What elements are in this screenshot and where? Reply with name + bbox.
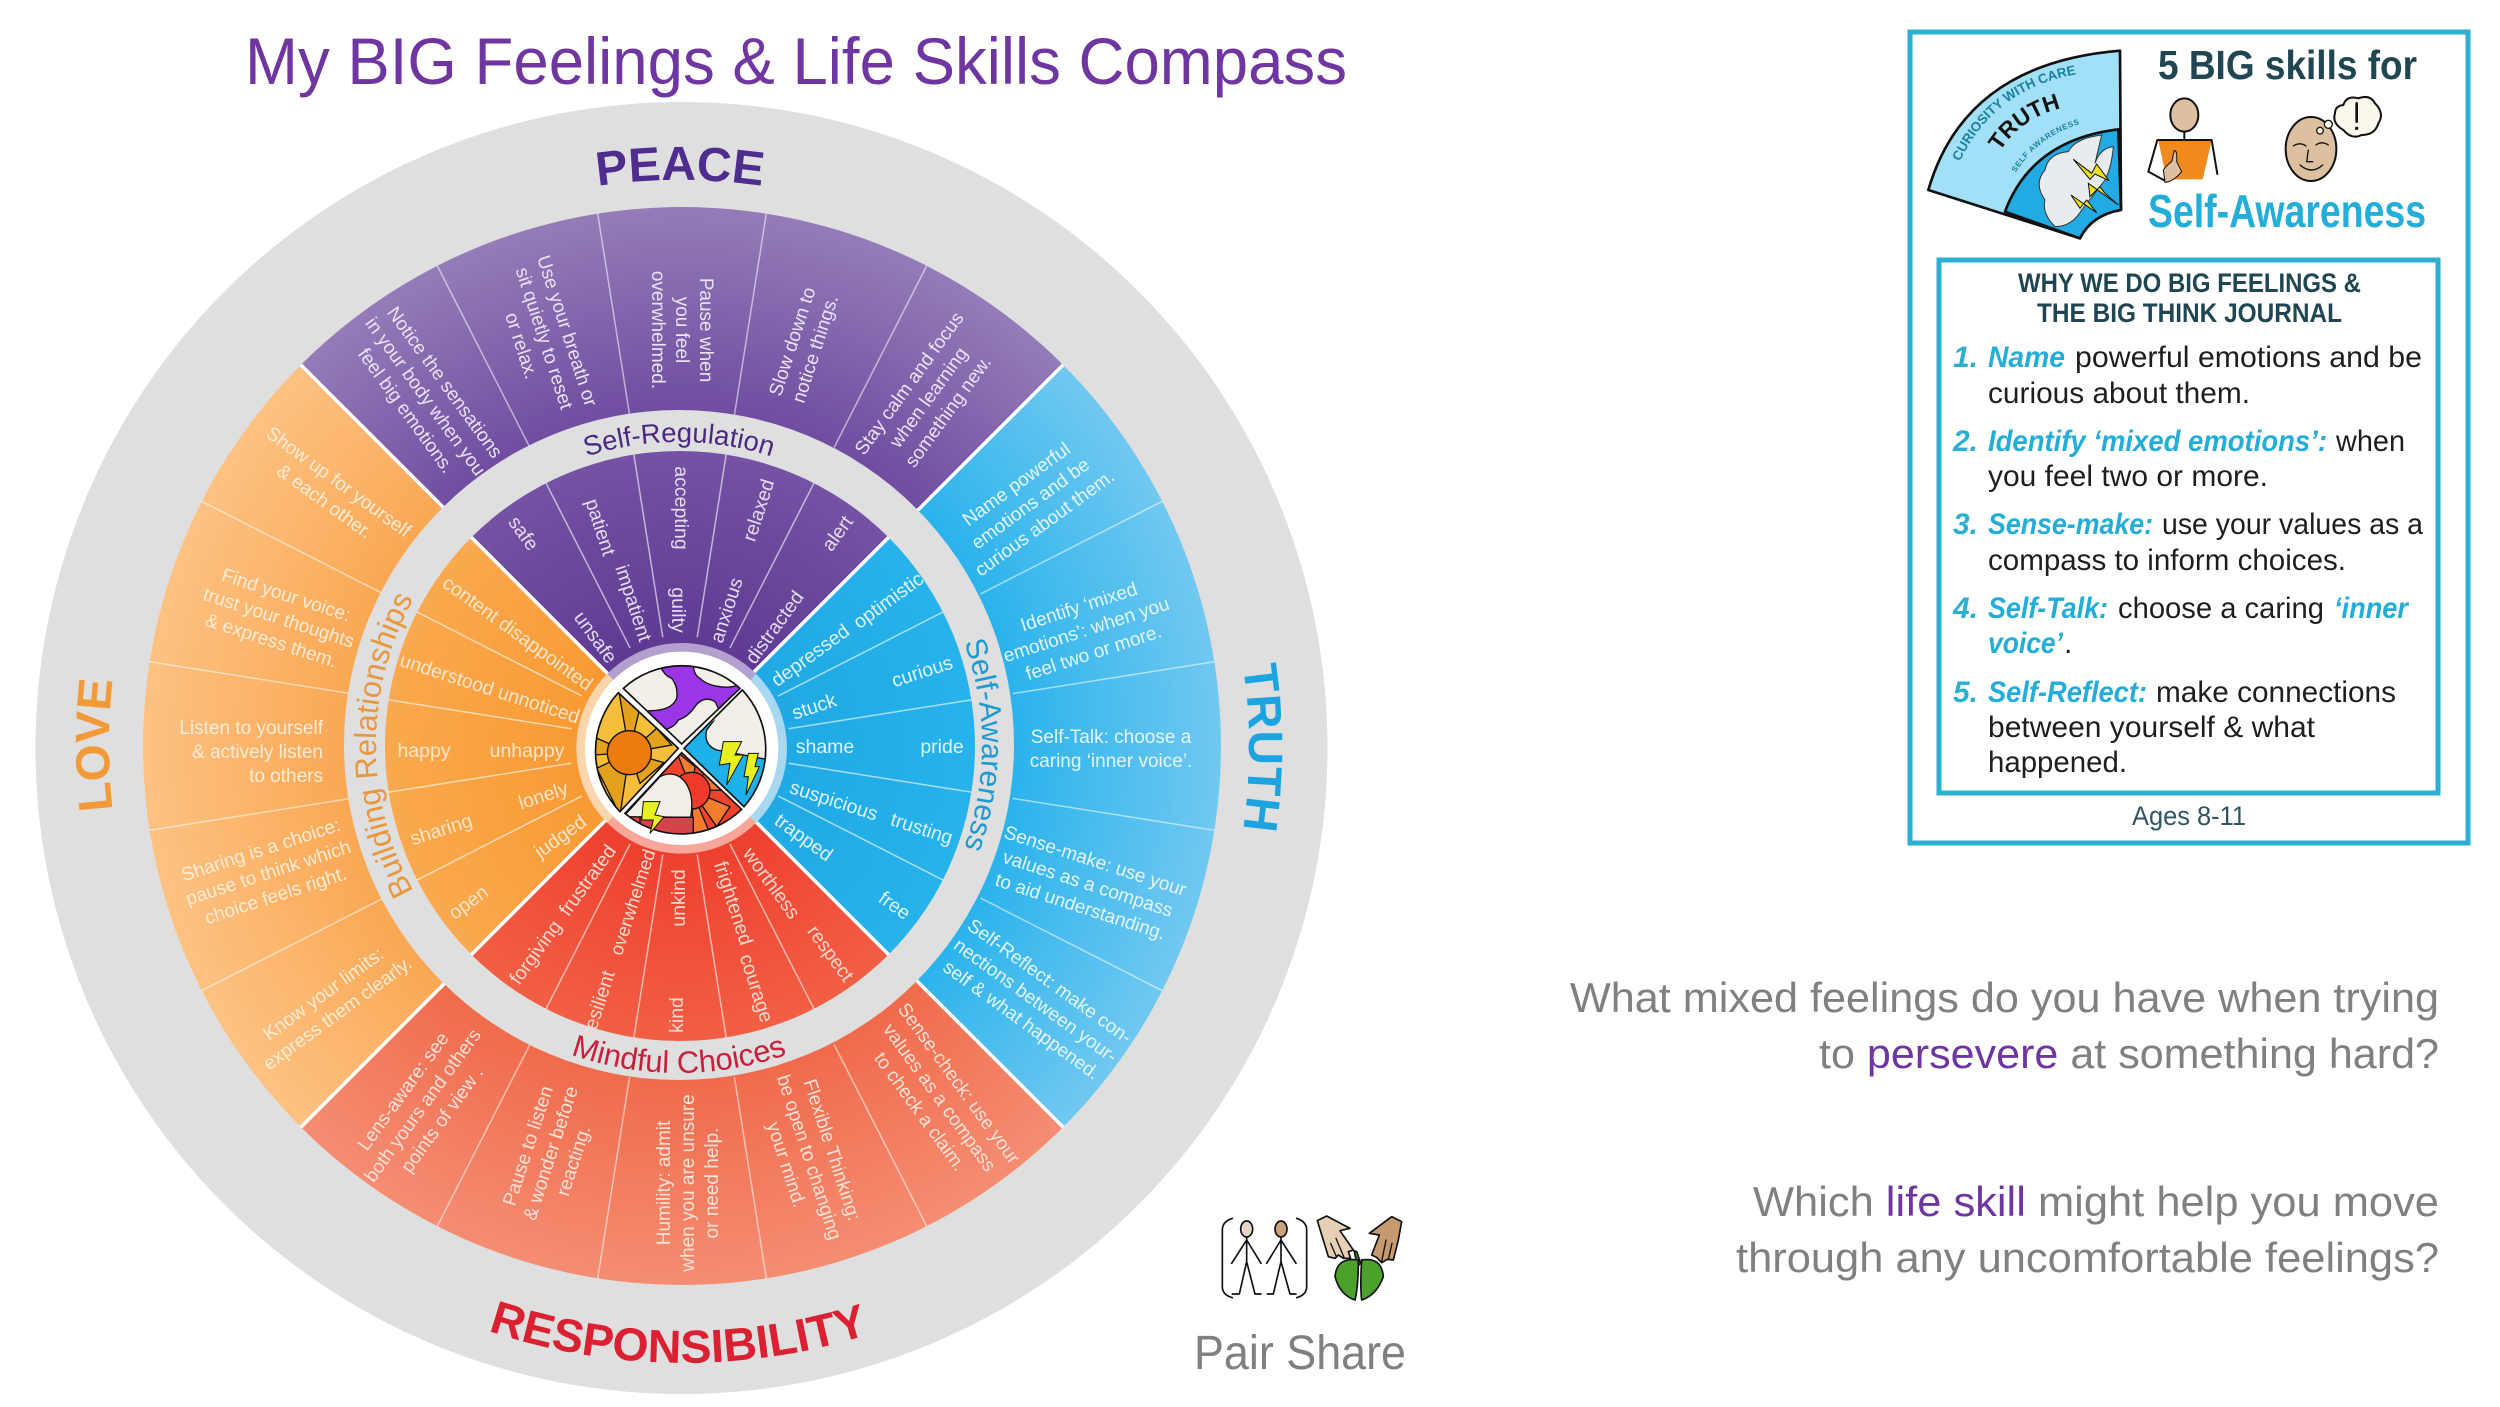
red feeling words: overwhelmed: [605, 847, 659, 958]
skill: Pause when: overwhelmed.: [647, 271, 668, 389]
question 2: [1736, 1178, 2439, 1281]
red feeling words: frightened: [709, 859, 757, 948]
item 1: Name: [1988, 341, 2065, 374]
item 4: Self-Talk:: [1988, 592, 2108, 625]
icon: truth wedge: TRUTH: [1987, 94, 2060, 148]
blue feeling words: suspicious: [787, 776, 881, 826]
question 2: Which life skill might help you move: [1753, 1178, 2439, 1225]
skill: Name: Name powerful: [959, 439, 1075, 531]
pair share label: Pair Share: [1194, 1327, 1406, 1380]
icon: two people in brackets: [1222, 1218, 1307, 1298]
blue feeling words: depressed: [767, 620, 854, 691]
hub quadrant: purple sky: [617, 663, 740, 745]
skill: Listen: Listen to yourself: [179, 718, 324, 739]
question 1: What mixed feelings do you have when trying: [1570, 974, 2439, 1021]
skill: Sense-check: to check a claim.: [869, 1049, 969, 1175]
item 1: [1953, 341, 2422, 410]
item 4: .: [2064, 627, 2072, 660]
skill: Humility: Humility: admit: [654, 1120, 675, 1245]
skill: Know your limits: Know your limits:: [260, 944, 388, 1045]
skill: Flexible Thinking: your mind.: [762, 1119, 809, 1210]
skill: Use your breath: sit quietly to reset: [511, 265, 577, 413]
skill: Humility: or need help.: [702, 1128, 723, 1238]
skill: Find your voice: & express them.: [203, 610, 340, 672]
orange feeling words: open: [445, 881, 493, 924]
question 1: [1570, 974, 2439, 1077]
value label: TRUTH: TRUTH: [1244, 662, 1282, 830]
skill: Self-Reflect: Self-Reflect: make con-: [963, 915, 1135, 1048]
icon: thinking face: [2286, 97, 2381, 181]
skill: Self-Talk: caring ‘inner voice’.: [1030, 751, 1192, 772]
item 1: 1.: [1953, 341, 1978, 374]
item 2: [1952, 425, 2405, 493]
orange outer skills: [176, 423, 416, 1075]
skill: Notice: Notice the sensations: [382, 303, 506, 462]
blue feeling words: [767, 568, 964, 925]
icon: hands sharing a fruit: [1317, 1216, 1402, 1300]
skill: Name: curious about them.: [971, 466, 1119, 581]
item 2: Identify ‘mixed emotions’:: [1988, 425, 2327, 458]
purple feeling words: relaxed: [739, 476, 779, 544]
skill: Use your breath: Use your breath or: [532, 253, 601, 410]
red feeling words: respect: [802, 921, 858, 986]
purple feeling words: safe: [503, 512, 543, 555]
blue feeling words: optimistic: [849, 568, 928, 634]
item 4: [1952, 592, 2410, 660]
value label: LOVE: LOVE: [76, 680, 112, 810]
skill: Sharing: pause to think which: [183, 837, 354, 910]
skill: Sharing: choice feels right.: [202, 863, 349, 929]
icon: person pointing to self: [2148, 98, 2217, 182]
skill: Pause when: you feel: [671, 297, 692, 363]
blue feeling words: shame: [796, 736, 854, 758]
skill: Stay calm: when learning: [885, 344, 972, 453]
skill: Self-Talk: Self-Talk: choose a: [1031, 727, 1192, 748]
skill: Listen: to others: [249, 766, 323, 787]
skill: Slow down: Slow down to: [766, 285, 820, 399]
item 3: compass to inform choices.: [1988, 544, 2346, 577]
orange feeling words: judged: [530, 811, 591, 864]
item 1: curious about them.: [1988, 377, 2250, 410]
skill: Humility: when you are unsure: [678, 1094, 699, 1273]
red feeling words: frustrated: [555, 841, 621, 920]
orange feeling words: sharing: [407, 810, 475, 850]
skill label: Mindful Choices: Mindful Choices: [573, 1035, 785, 1074]
skill: Use your breath: or relax.: [500, 310, 541, 382]
red feeling words: courage: [735, 951, 777, 1025]
skill: Know your limits: express them clearly.: [260, 953, 416, 1075]
purple feeling words: alert: [818, 511, 858, 555]
centre hub illustration: [576, 643, 787, 854]
item 2: 2.: [1952, 425, 1978, 458]
orange feeling words: [397, 572, 597, 924]
orange feeling words: happy: [397, 740, 451, 762]
box heading: WHY WE DO BIG FEELINGS &: [2018, 268, 2361, 298]
orange feeling words: unhappy: [490, 740, 565, 762]
skill: Stay calm: Stay calm and focus: [851, 308, 969, 459]
middle grey ring: [344, 410, 1014, 1080]
skill: Self-Reflect: nections between your-: [949, 935, 1121, 1067]
compass wheel: [36, 102, 1328, 1394]
box heading: [2018, 268, 2361, 328]
ages label: Ages 8-11: [2132, 801, 2246, 831]
inner ring wedges: [385, 451, 975, 1041]
red feeling words: forgiving: [505, 916, 566, 989]
red outer skills: [341, 999, 1024, 1273]
red feeling words: kind: [666, 997, 688, 1033]
item 5: between yourself & what: [1988, 711, 2316, 744]
skill: Identify: feel two or more.: [1023, 621, 1164, 685]
blue feeling words: stuck: [789, 689, 840, 724]
blue feeling words: free: [874, 887, 914, 925]
skill: Pause when: Pause when: [695, 278, 716, 382]
skill label: Self-Regulation: Self-Regulation: [584, 424, 773, 456]
skill label: Self-Awareness: Self-Awareness: [966, 639, 1001, 850]
card sub-heading: Self-Awareness: [2148, 185, 2426, 237]
skill: Show up: Show up for yourself: [262, 423, 415, 542]
red feeling words: resilient: [578, 967, 620, 1039]
skill: Sense-check: Sense-check: use your: [893, 999, 1024, 1169]
item 3: use your values as a: [2162, 508, 2423, 541]
skill: Find your voice: Find your voice:: [219, 565, 353, 626]
purple feeling words: accepting: [670, 466, 692, 550]
purple feeling words: patient: [581, 496, 620, 559]
skill: Lens-aware: Lens-aware: see: [354, 1029, 454, 1155]
item 5: happened.: [1988, 746, 2127, 779]
item 1: powerful emotions and be: [2075, 341, 2422, 374]
item 3: Sense-make:: [1988, 508, 2153, 541]
skill: Pause to listen: reacting.: [553, 1123, 595, 1199]
blue feeling words: trapped: [770, 809, 837, 866]
skill: Listen: & actively listen: [192, 742, 323, 763]
blue feeling words: curious: [889, 652, 956, 692]
skill: Sense-make: values as a compass: [1000, 847, 1175, 922]
orange feeling words: understood unnoticed: [397, 650, 582, 728]
inner box: why we do big feelings: [1939, 260, 2438, 793]
skill: Sharing: Sharing is a choice:: [179, 815, 343, 886]
skill: Sense-make: Sense-make: use your: [1001, 822, 1189, 901]
red feeling words: unkind: [668, 869, 690, 927]
skill: Show up: & each other.: [273, 461, 376, 543]
item 2: you feel two or more.: [1988, 460, 2268, 493]
value label: PEACE: PEACE: [596, 146, 764, 186]
card heading: 5 BIG skills for: [2158, 42, 2417, 88]
orange feeling words: lonely: [516, 778, 571, 814]
icon: truth wedge: CURIOSITY WITH CARE: [1953, 65, 2076, 160]
item 5: Self-Reflect:: [1988, 676, 2147, 709]
skill: Stay calm: something new.: [901, 352, 996, 472]
title: My BIG Feelings & Life Skills Compass: [245, 24, 1347, 98]
skill: Pause to listen: Pause to listen: [499, 1084, 558, 1209]
skill: Sense-make: to aid understanding.: [992, 870, 1168, 945]
orange feeling words: content disappointed: [438, 572, 597, 696]
value label: RESPONSIBILITY: RESPONSIBILITY: [490, 1301, 860, 1364]
pair share icon: [1222, 1216, 1402, 1300]
skill: Pause to listen: & wonder before: [520, 1084, 583, 1223]
outer grey ring: [36, 102, 1328, 1394]
skill: Flexible Thinking: be open to changing: [772, 1072, 845, 1243]
hub quadrant: storm: [684, 683, 770, 807]
skill: Lens-aware: points of view .: [397, 1063, 488, 1177]
skill: Lens-aware: both yours and others: [361, 1025, 486, 1186]
item 5: [1953, 676, 2396, 779]
item 4: voice’: [1988, 627, 2064, 660]
purple feeling words: [503, 466, 858, 668]
skill: Find your voice: trust your thoughts: [200, 584, 357, 653]
question 2: through any uncomfortable feelings?: [1736, 1234, 2439, 1281]
skill: Self-Reflect: self & what happened.: [939, 957, 1103, 1084]
box heading: THE BIG THINK JOURNAL: [2037, 298, 2342, 328]
item 4: ‘inner: [2334, 592, 2410, 625]
question 1: to persevere at something hard?: [1819, 1030, 2439, 1077]
item 3: 3.: [1953, 508, 1978, 541]
skill: Flexible Thinking: Flexible Thinking:: [799, 1077, 864, 1223]
purple outer skills: [341, 253, 1007, 494]
card: 5 BIG skills for Self-Awareness: [1908, 30, 2470, 846]
item 3: [1953, 508, 2423, 577]
hub quadrant: sun: [593, 688, 678, 815]
skill: Slow down: notice things.: [789, 293, 843, 406]
item 4: 4.: [1952, 592, 1978, 625]
purple feeling words: impatient: [610, 562, 656, 645]
icon: truth wedge: SELF AWARENESS: [2012, 119, 2079, 172]
item 2: when: [2335, 425, 2405, 458]
purple feeling words: distracted: [741, 587, 809, 668]
red feeling words: worthless: [737, 843, 804, 924]
skill: Sense-check: values as a compass: [878, 1020, 999, 1176]
hub quadrant: sun and rain: [623, 752, 742, 840]
item 5: make connections: [2156, 676, 2396, 709]
skill label: Building Relationships: Building Relationships: [354, 594, 412, 899]
purple feeling words: unsafe: [569, 607, 621, 668]
icon: truth wedge: [1927, 49, 2122, 240]
blue feeling words: pride: [920, 736, 964, 758]
red feeling words: [505, 841, 858, 1039]
purple feeling words: guilty: [667, 587, 689, 633]
skill: Notice: in your body when you: [360, 314, 489, 480]
skill: Identify: Identify ‘mixed: [1018, 579, 1140, 636]
skill: Name: emotions and be: [968, 454, 1094, 554]
skill: Identify: emotions’: when you: [1001, 594, 1172, 667]
skill: Notice: feel big emotions.: [353, 345, 458, 477]
blue outer skills: [935, 427, 1192, 1087]
outer ring wedges: [143, 207, 1221, 1285]
blue feeling words: trusting: [888, 809, 956, 849]
purple feeling words: anxious: [706, 575, 748, 646]
item 5: 5.: [1953, 676, 1978, 709]
item 4: choose a caring: [2118, 592, 2324, 625]
